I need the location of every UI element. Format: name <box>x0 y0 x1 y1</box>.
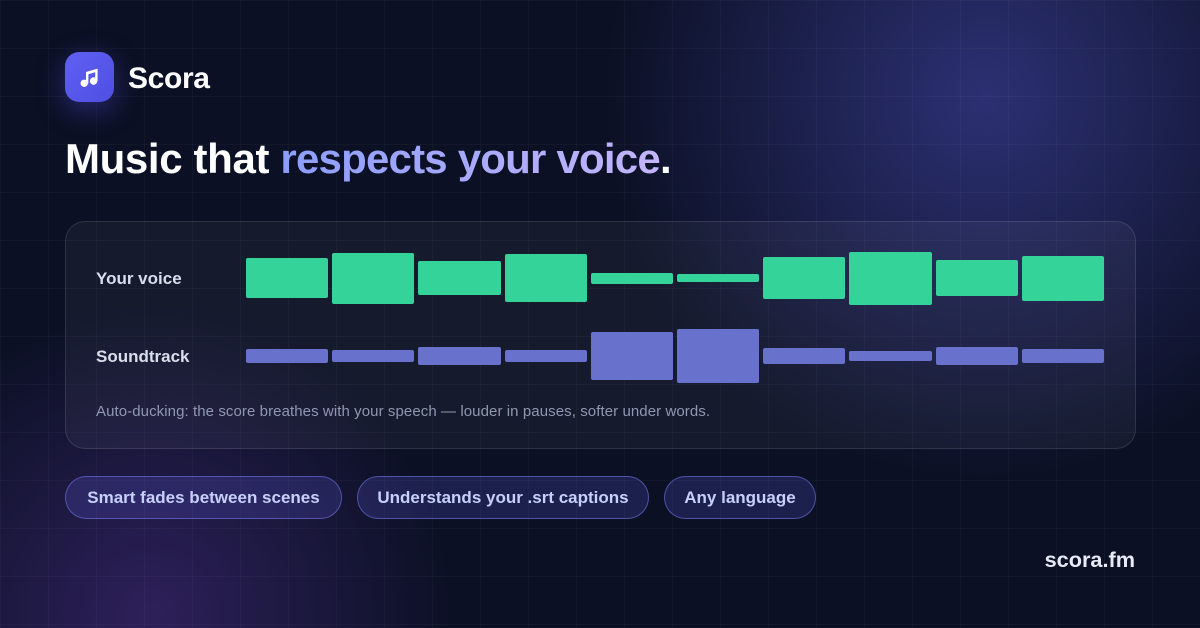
panel: waveform comparison <box>65 221 1136 449</box>
chip: any language <box>664 476 816 519</box>
chart: voice bars <box>246 252 1104 305</box>
caption: auto-ducking explanation: Auto-ducking: the score breathes with your speech — louder in pauses, softer under words. <box>96 403 710 420</box>
chip: any language: Any language <box>684 488 796 507</box>
brand name: Scora <box>128 62 210 95</box>
chip: srt captions <box>357 476 649 519</box>
chip: smart fades: Smart fades between scenes <box>87 488 320 507</box>
chart: soundtrack bars <box>246 329 1104 383</box>
label: your voice: Your voice <box>96 269 182 288</box>
url: scora.fm <box>1045 547 1135 572</box>
title: Music that respects your voice. <box>65 135 671 182</box>
label: soundtrack: Soundtrack <box>96 347 190 366</box>
chip: srt captions: Understands your .srt captions <box>377 488 629 507</box>
icon: app logo with music note <box>65 52 114 102</box>
chip: smart fades <box>65 476 342 519</box>
